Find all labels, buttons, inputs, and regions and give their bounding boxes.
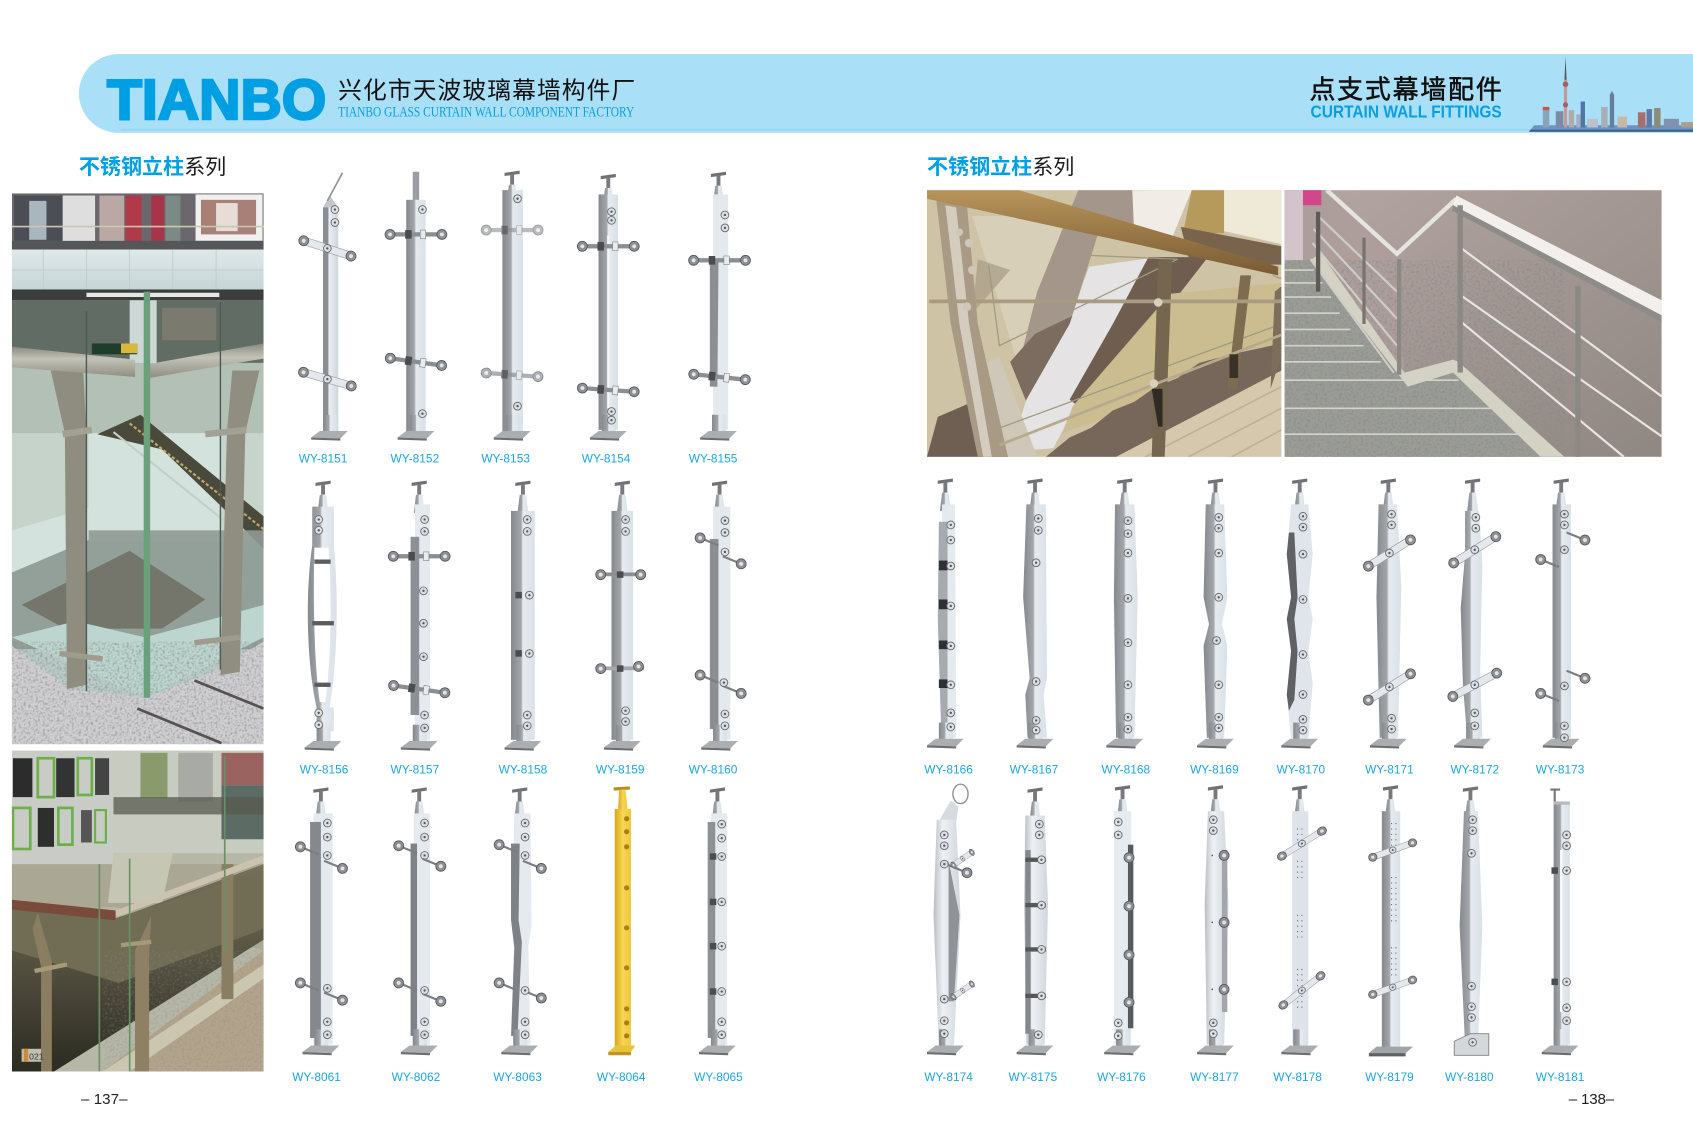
- post: [1017, 478, 1053, 749]
- label: WY-8175: [1009, 1070, 1058, 1084]
- stainless posts: [936, 194, 1008, 457]
- diagonal pale wall and dark bands: [1010, 316, 1072, 400]
- product WY-8172: [1446, 478, 1503, 776]
- label: WY-8173: [1536, 762, 1585, 776]
- handrail: [1327, 190, 1456, 254]
- post: [1367, 785, 1418, 1056]
- label: WY-8062: [392, 1070, 440, 1084]
- label: WY-8171: [1365, 762, 1414, 776]
- label: WY-8151: [299, 451, 348, 465]
- product WY-8152: [385, 172, 447, 465]
- product WY-8179: [1365, 785, 1418, 1084]
- product WY-8181: [1536, 788, 1585, 1084]
- label: WY-8177: [1190, 1070, 1239, 1084]
- label: WY-8064: [597, 1070, 646, 1084]
- post: [1281, 478, 1318, 749]
- label: WY-8167: [1010, 762, 1058, 776]
- label: WY-8061: [292, 1070, 341, 1084]
- product WY-8174: [924, 784, 976, 1084]
- photo: stairway with stainless rod railing: [1285, 190, 1662, 457]
- post: [1106, 478, 1143, 749]
- product WY-8178: [1273, 785, 1328, 1084]
- handrail: [927, 190, 1278, 275]
- label: WY-8176: [1097, 1070, 1146, 1084]
- product WY-8171: [1361, 478, 1417, 776]
- stair flight: [1285, 260, 1564, 457]
- label: WY-8159: [596, 762, 645, 776]
- label: WY-8156: [300, 762, 349, 776]
- product WY-8160: [689, 481, 746, 776]
- post: [699, 787, 736, 1055]
- product WY-8177: [1190, 785, 1239, 1084]
- reflections: [12, 864, 264, 950]
- post: [505, 481, 541, 751]
- product WY-8064: [597, 786, 646, 1084]
- product WY-8156: [300, 481, 349, 776]
- company name English: TIANBO GLASS CURTAIN WALL COMPONENT FACTORY: [338, 105, 634, 121]
- label: WY-8180: [1445, 1070, 1494, 1084]
- label: WY-8154: [582, 451, 631, 465]
- label: WY-8153: [481, 451, 530, 465]
- post: [1454, 786, 1489, 1055]
- product WY-8065: [694, 787, 743, 1084]
- label: WY-8065: [694, 1070, 743, 1084]
- post: [1542, 788, 1578, 1055]
- product WY-8063: [493, 787, 546, 1084]
- panel: left product grid: [292, 171, 751, 1084]
- rail and posts: [32, 913, 52, 1071]
- banner band: [79, 54, 1693, 133]
- post: [577, 174, 639, 441]
- label: WY-8179: [1365, 1070, 1414, 1084]
- product WY-8175: [1009, 787, 1058, 1084]
- photo: atrium glass balustrade: [12, 193, 264, 744]
- page number left: – 137–: [81, 1091, 128, 1108]
- brown zigzag stairs: [1046, 343, 1281, 457]
- post: [1197, 785, 1234, 1055]
- post: [596, 481, 646, 751]
- product WY-8159: [596, 481, 646, 776]
- catalog title English: CURTAIN WALL FITTINGS: [1311, 102, 1502, 122]
- posts and rails: [51, 370, 86, 689]
- post: [1017, 787, 1053, 1055]
- post: [608, 786, 635, 1055]
- post: [385, 172, 447, 441]
- product WY-8062: [392, 787, 446, 1084]
- photo stamp: 021: [29, 1052, 44, 1062]
- product WY-8176: [1097, 785, 1146, 1084]
- post: [927, 478, 964, 749]
- photo: staircase glass balustrade with wooden handrail: [927, 190, 1281, 457]
- posts: [1457, 205, 1463, 373]
- catalog title Chinese: 点支式幕墙配件: [1309, 75, 1502, 104]
- rods: [929, 300, 1281, 303]
- product WY-8168: [1101, 478, 1150, 776]
- post: [927, 784, 976, 1055]
- product WY-8154: [577, 174, 639, 465]
- panel: right product grid: [924, 478, 1590, 1084]
- product WY-8169: [1190, 478, 1239, 776]
- product WY-8167: [1010, 478, 1058, 776]
- product WY-8173: [1536, 478, 1590, 776]
- rods left group: [1311, 214, 1397, 373]
- label: WY-8168: [1101, 762, 1150, 776]
- post: [1446, 478, 1503, 749]
- photo: glass balustrade with wooden handrail: [12, 751, 264, 1071]
- label: WY-8160: [689, 762, 738, 776]
- post: [295, 787, 347, 1055]
- label: WY-8181: [1536, 1070, 1585, 1084]
- post: [695, 481, 746, 751]
- page number right: – 138–: [1569, 1091, 1615, 1108]
- product WY-8170: [1277, 478, 1326, 776]
- glass panel edges: [989, 254, 1281, 432]
- label: WY-8152: [391, 451, 439, 465]
- label: WY-8169: [1190, 762, 1239, 776]
- company name Chinese: 兴化市天波玻璃幕墙构件厂: [338, 77, 635, 104]
- product WY-8153: [481, 171, 543, 465]
- product WY-8158: [499, 481, 548, 776]
- post: [1197, 478, 1234, 749]
- post: [305, 481, 341, 751]
- post: [394, 787, 446, 1055]
- heading: left page series: 不锈钢立柱系列: [79, 154, 226, 179]
- brand wordmark: TIANBO: [107, 68, 326, 131]
- post: [1276, 785, 1328, 1055]
- header banner: [79, 54, 1693, 133]
- post: [1361, 478, 1417, 749]
- label: WY-8172: [1450, 762, 1499, 776]
- label: WY-8155: [689, 451, 738, 465]
- light treads: [1116, 370, 1281, 457]
- product WY-8180: [1445, 786, 1494, 1084]
- product WY-8155: [688, 172, 751, 465]
- post: [688, 172, 751, 441]
- post: [1536, 478, 1590, 749]
- product WY-8157: [388, 481, 450, 776]
- product WY-8061: [292, 787, 347, 1084]
- post: [297, 173, 357, 441]
- post: [388, 481, 450, 751]
- heading: right page series: 不锈钢立柱系列: [927, 154, 1074, 179]
- product WY-8166: [924, 478, 973, 776]
- post: [1104, 785, 1141, 1055]
- stair edges: [1285, 270, 1518, 434]
- label: WY-8170: [1277, 762, 1326, 776]
- label: WY-8157: [391, 762, 439, 776]
- icon: city skyline: [1529, 56, 1693, 132]
- escalator: [97, 415, 264, 549]
- label: WY-8166: [924, 762, 973, 776]
- wall art panels: [13, 758, 32, 797]
- label: WY-8063: [493, 1070, 542, 1084]
- label: WY-8174: [924, 1070, 973, 1084]
- rods right group: [1459, 246, 1662, 457]
- post: [481, 171, 543, 441]
- label: WY-8178: [1273, 1070, 1322, 1084]
- post: [494, 787, 546, 1055]
- product WY-8151: [297, 173, 357, 465]
- label: WY-8158: [499, 762, 548, 776]
